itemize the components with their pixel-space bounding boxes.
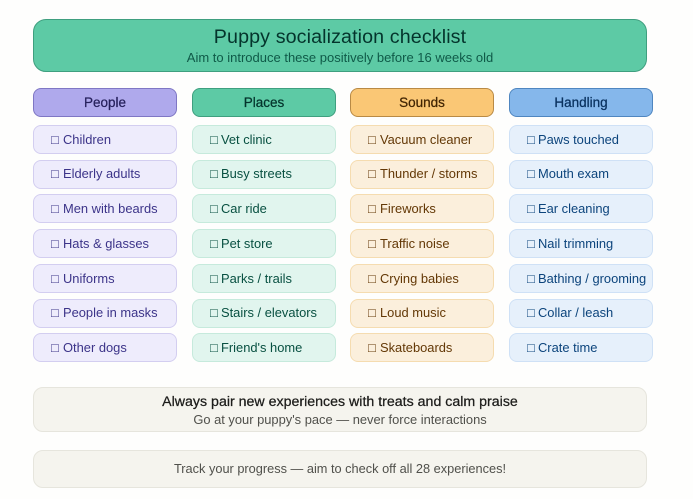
- item: Children: □: [51, 132, 59, 147]
- title: Puppy socialization checklist: [214, 26, 466, 48]
- item: Vet clinic: Vet clinic: [221, 132, 272, 147]
- item: Ear cleaning: Ear cleaning: [538, 201, 610, 216]
- header: People: [33, 88, 177, 117]
- item: Parks / trails: [192, 264, 336, 293]
- item: Bathing / grooming: Bathing / grooming: [538, 271, 646, 286]
- item: Pet store: [192, 229, 336, 258]
- item: Stairs / elevators: Stairs / elevators: [221, 305, 317, 320]
- item: Skateboards: Skateboards: [380, 340, 452, 355]
- item: Pet store: Pet store: [221, 236, 273, 251]
- item: Crate time: □: [527, 340, 535, 355]
- item: Skateboards: [350, 333, 494, 362]
- item: Hats & glasses: □: [51, 236, 59, 251]
- item: Crying babies: □: [368, 271, 376, 286]
- item: Men with beards: [33, 194, 177, 223]
- item: Other dogs: Other dogs: [63, 340, 127, 355]
- tip text: Go at your puppy's pace — never force interactions: [193, 412, 487, 426]
- item: Crying babies: Crying babies: [380, 271, 459, 286]
- title banner: [33, 19, 647, 72]
- item: Loud music: [350, 299, 494, 328]
- item: Thunder / storms: Thunder / storms: [380, 166, 477, 181]
- item: Nail trimming: [509, 229, 653, 258]
- item: Nail trimming: Nail trimming: [538, 236, 613, 251]
- item: Loud music: □: [368, 305, 376, 320]
- item: Men with beards: □: [51, 201, 59, 216]
- item: Paws touched: Paws touched: [538, 132, 619, 147]
- column: Sounds: [350, 88, 494, 362]
- item: Nail trimming: □: [527, 236, 535, 251]
- item: Pet store: □: [210, 236, 218, 251]
- progress text: Track your progress — aim to check off all 28 experiences!: [174, 461, 506, 476]
- item: Collar / leash: [509, 299, 653, 328]
- item: Collar / leash: Collar / leash: [538, 305, 613, 320]
- subtitle: Aim to introduce these positively before 16 weeks old: [187, 50, 493, 65]
- item: Traffic noise: □: [368, 236, 376, 251]
- item: Vacuum cleaner: [350, 125, 494, 154]
- item: Fireworks: [350, 194, 494, 223]
- item: Friend's home: □: [210, 340, 218, 355]
- item: Ear cleaning: □: [527, 201, 535, 216]
- item: Hats & glasses: [33, 229, 177, 258]
- item: Bathing / grooming: [509, 264, 653, 293]
- item: Other dogs: □: [51, 340, 59, 355]
- item: Ear cleaning: [509, 194, 653, 223]
- item: Mouth exam: □: [527, 166, 535, 181]
- item: People in masks: □: [51, 305, 59, 320]
- item: Car ride: □: [210, 201, 218, 216]
- item: Other dogs: [33, 333, 177, 362]
- item: Crate time: [509, 333, 653, 362]
- item: Busy streets: □: [210, 166, 218, 181]
- item: Thunder / storms: □: [368, 166, 376, 181]
- item: Friend's home: [192, 333, 336, 362]
- item: Vacuum cleaner: □: [368, 132, 376, 147]
- item: Stairs / elevators: [192, 299, 336, 328]
- item: Uniforms: Uniforms: [63, 271, 115, 286]
- item: Parks / trails: □: [210, 271, 218, 286]
- item: Traffic noise: [350, 229, 494, 258]
- header: Places: Places: [244, 95, 284, 110]
- item: Vacuum cleaner: Vacuum cleaner: [380, 132, 472, 147]
- column: Places: [192, 88, 336, 362]
- item: Skateboards: □: [368, 340, 376, 355]
- item: Hats & glasses: Hats & glasses: [63, 236, 149, 251]
- item: Busy streets: Busy streets: [221, 166, 292, 181]
- item: Car ride: [192, 194, 336, 223]
- header: Sounds: Sounds: [399, 95, 445, 110]
- progress panel: [33, 450, 647, 488]
- item: Elderly adults: Elderly adults: [63, 166, 140, 181]
- item: Thunder / storms: [350, 160, 494, 189]
- item: Bathing / grooming: □: [527, 271, 535, 286]
- header: People: People: [84, 95, 126, 110]
- item: Paws touched: □: [527, 132, 535, 147]
- item: Traffic noise: Traffic noise: [380, 236, 450, 251]
- item: Men with beards: Men with beards: [63, 201, 158, 216]
- column: Handling: [509, 88, 653, 362]
- item: Elderly adults: □: [51, 166, 59, 181]
- item: Children: [33, 125, 177, 154]
- tip panel: [33, 387, 647, 432]
- item: Busy streets: [192, 160, 336, 189]
- item: Uniforms: □: [51, 271, 59, 286]
- item: Friend's home: Friend's home: [221, 340, 302, 355]
- item: Loud music: Loud music: [380, 305, 446, 320]
- header: Handling: Handling: [554, 95, 608, 110]
- header: Places: [192, 88, 336, 117]
- header: Sounds: [350, 88, 494, 117]
- item: People in masks: People in masks: [63, 305, 158, 320]
- item: Elderly adults: [33, 160, 177, 189]
- item: Paws touched: [509, 125, 653, 154]
- item: Fireworks: □: [368, 201, 376, 216]
- item: Vet clinic: [192, 125, 336, 154]
- tip heading: Always pair new experiences with treats and calm praise: [162, 394, 518, 410]
- item: Fireworks: Fireworks: [380, 201, 436, 216]
- item: Mouth exam: [509, 160, 653, 189]
- item: Crying babies: [350, 264, 494, 293]
- column: People: [33, 88, 177, 362]
- item: Children: Children: [63, 132, 111, 147]
- item: Vet clinic: □: [210, 132, 218, 147]
- item: People in masks: [33, 299, 177, 328]
- item: Mouth exam: Mouth exam: [538, 166, 609, 181]
- item: Stairs / elevators: □: [210, 305, 218, 320]
- item: Collar / leash: □: [527, 305, 535, 320]
- item: Car ride: Car ride: [221, 201, 267, 216]
- header: Handling: [509, 88, 653, 117]
- item: Uniforms: [33, 264, 177, 293]
- item: Crate time: Crate time: [538, 340, 597, 355]
- item: Parks / trails: Parks / trails: [221, 271, 292, 286]
